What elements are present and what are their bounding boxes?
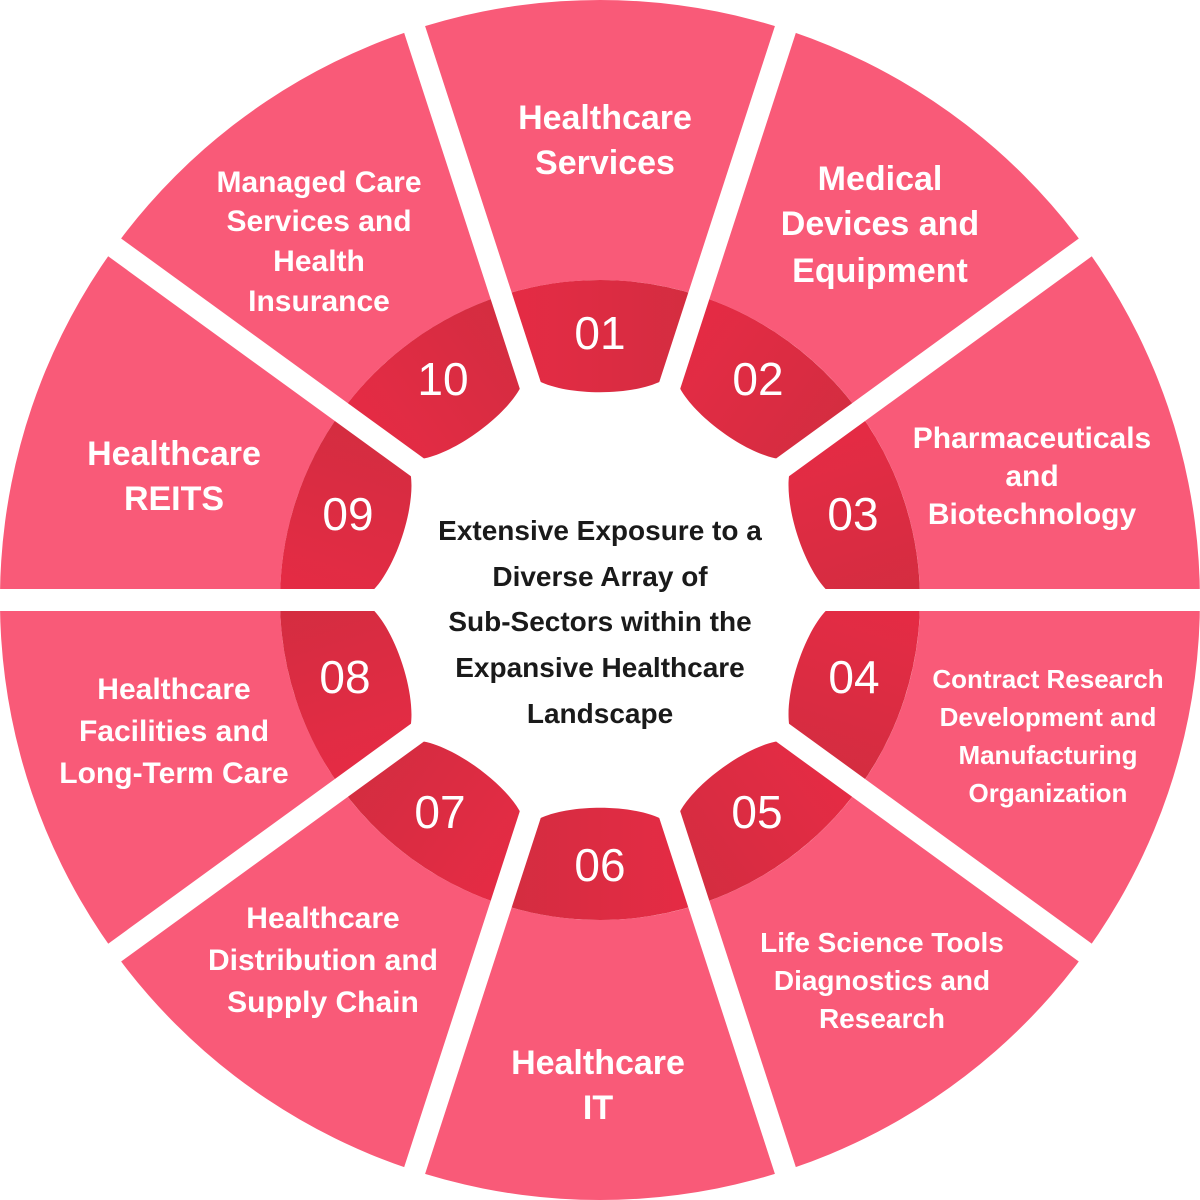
dark number tabs — [265, 280, 935, 920]
label 08: Facilities: Healthcare — [97, 673, 251, 706]
center title: Extensive Exposure to a — [438, 515, 762, 546]
numbers: 07 — [414, 786, 466, 838]
numbers: 03 — [827, 488, 879, 540]
label 07: Distribution: Distribution and — [208, 944, 438, 977]
label 02: Medical Devices and Equipment: Medical — [818, 160, 942, 198]
label 01: Healthcare Services: Healthcare — [518, 99, 692, 137]
numbers: 01 — [574, 307, 626, 359]
numbers: 04 — [828, 651, 880, 703]
label 06: Healthcare IT: IT — [583, 1089, 613, 1127]
label 10: Managed Care: Health — [273, 245, 365, 278]
numbers: 08 — [319, 651, 371, 703]
label 10: Managed Care — [216, 166, 422, 318]
label 08: Facilities — [59, 673, 289, 790]
numbers: 09 — [322, 488, 374, 540]
label 01: Healthcare Services: Services — [535, 144, 675, 182]
numbers: 02 — [732, 353, 784, 405]
label 04: Contract Research: Contract Research — [932, 664, 1164, 694]
numbers: 06 — [574, 839, 626, 891]
label 05: Life Science Tools — [760, 927, 1004, 1034]
center title — [438, 515, 762, 729]
label 04: Contract Research: Manufacturing — [958, 740, 1138, 770]
label 03: Pharmaceuticals and Biotechnology: Biotechnology — [928, 498, 1136, 531]
label 10: Managed Care: Insurance — [248, 285, 390, 318]
label 05: Life Science Tools: Diagnostics and — [774, 965, 990, 996]
label 07: Distribution: Healthcare — [246, 902, 400, 935]
label 08: Facilities: Facilities and — [79, 715, 269, 748]
center title: Sub-Sectors within the — [448, 606, 752, 637]
label 02: Medical Devices and Equipment: Equipment — [792, 252, 968, 290]
label 03: Pharmaceuticals and Biotechnology: and — [1005, 460, 1059, 493]
label 03: Pharmaceuticals and Biotechnology: Pharmaceuticals — [913, 422, 1151, 455]
label 04: Contract Research: Organization — [969, 778, 1127, 808]
label 03: Pharmaceuticals and Biotechnology — [913, 422, 1151, 531]
label 07: Distribution — [208, 902, 438, 1019]
center title: Expansive Healthcare — [455, 652, 745, 683]
label 09: REITS — [87, 435, 261, 518]
label 05: Life Science Tools: Research — [819, 1003, 945, 1034]
numbers: 10 — [417, 353, 469, 405]
center title: Landscape — [527, 698, 673, 729]
label 06: Healthcare IT — [511, 1044, 685, 1127]
label 01: Healthcare Services — [518, 99, 692, 182]
numbers — [319, 307, 880, 891]
numbers: 05 — [731, 786, 783, 838]
label 09: REITS: Healthcare — [87, 435, 261, 473]
label 10: Managed Care: Managed Care — [216, 166, 422, 199]
label 07: Distribution: Supply Chain — [227, 986, 419, 1019]
label 04: Contract Research: Development and — [940, 702, 1156, 732]
label 04: Contract Research — [932, 664, 1164, 808]
label 02: Medical Devices and Equipment: Devices and — [781, 205, 979, 243]
label 10: Managed Care: Services and — [226, 205, 412, 238]
label 05: Life Science Tools: Life Science Tools — [760, 927, 1004, 958]
label 08: Facilities: Long-Term Care — [59, 757, 289, 790]
center title: Diverse Array of — [492, 561, 708, 592]
label 06: Healthcare IT: Healthcare — [511, 1044, 685, 1082]
label 09: REITS: REITS — [124, 480, 224, 518]
label 02: Medical Devices and Equipment — [781, 160, 979, 290]
